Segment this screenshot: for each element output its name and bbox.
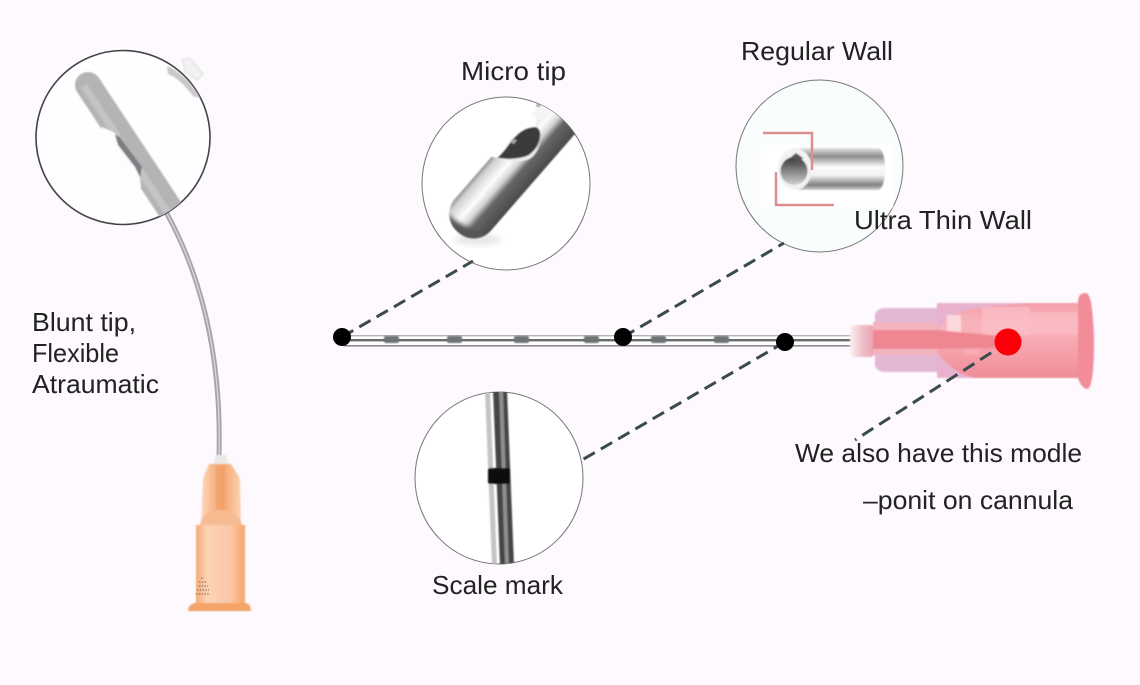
- dashed leader: wall: [623, 243, 784, 337]
- hub dot triangle: [196, 578, 210, 594]
- icon: blunt cannula tip: [84, 85, 176, 218]
- icon: needle with scale mark: [485, 390, 514, 565]
- text: blunt tip description: Flexible: [32, 338, 119, 368]
- marker dot: wall: [614, 328, 632, 346]
- icon: tube cross-section: [760, 145, 893, 208]
- cut-out above the side hole: [492, 100, 540, 158]
- text: point on cannula: –ponit on cannula: [863, 485, 1074, 515]
- flexible tube: [166, 212, 219, 456]
- icon: metal micro tip: [448, 104, 575, 246]
- heading: regular wall: Regular Wall: [741, 36, 893, 66]
- marker dot: red point on cannula: [994, 328, 1022, 356]
- icon: tube connector: [167, 58, 203, 98]
- side hole: [497, 127, 540, 159]
- panel: blunt tip circle: [36, 50, 210, 224]
- dashed leader: micro tip: [342, 261, 473, 337]
- remaining tube highlight: [532, 105, 549, 119]
- panel: scale mark circle: [415, 390, 583, 565]
- heading: ultra thin wall: Ultra Thin Wall: [854, 205, 1032, 235]
- arrow: regular wall marker: [763, 133, 812, 170]
- needle shaft: [344, 335, 852, 347]
- dashed leader: scale mark: [582, 342, 785, 460]
- pink hub: [850, 293, 1094, 389]
- panel: wall thickness circle: [736, 80, 903, 252]
- text: modle note: We also have this modle: [795, 438, 1082, 468]
- dashed leader: red point: [855, 342, 1008, 440]
- orange hub: [188, 455, 251, 611]
- marker dot: scale: [776, 333, 794, 351]
- scale marks: [384, 336, 729, 343]
- flexible cannula illustration: [166, 212, 251, 611]
- label: scale mark: Scale mark: [432, 570, 564, 600]
- arrow: thin wall marker: [776, 172, 834, 205]
- panel: micro tip circle: [422, 96, 590, 270]
- text: blunt tip description: [32, 307, 159, 399]
- heading: micro tip: Micro tip: [461, 56, 566, 86]
- text: blunt tip description: Blunt tip,: [32, 307, 136, 337]
- marker dot: tip: [333, 328, 351, 346]
- rim highlight: [497, 142, 541, 162]
- text: blunt tip description: Atraumatic: [32, 369, 159, 399]
